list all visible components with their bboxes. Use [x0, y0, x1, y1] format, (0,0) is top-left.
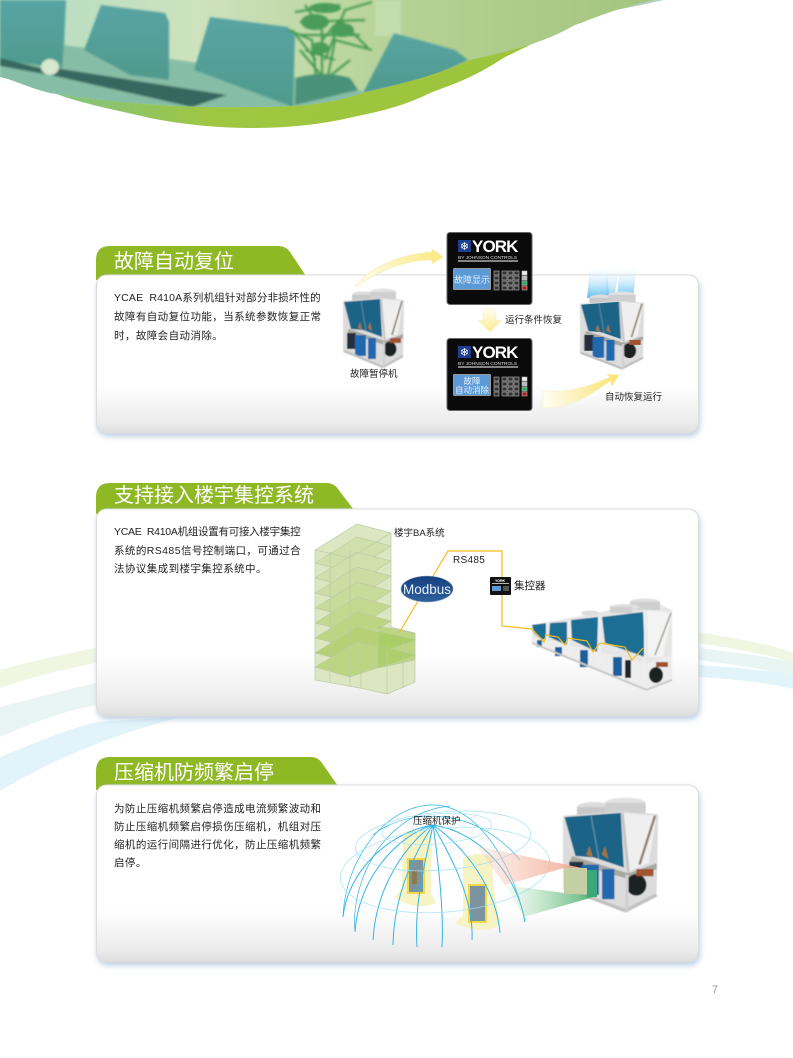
- compressor left: [395, 830, 436, 906]
- controller: fault cleared: [447, 338, 532, 410]
- label: 故障暂停机: [350, 368, 398, 380]
- beam from chiller: [476, 846, 597, 917]
- description text: [114, 525, 301, 575]
- icon: stopped chiller: [343, 288, 404, 368]
- heading tab: 压缩机防频繁启停: [114, 761, 274, 784]
- heading tab: 支持接入楼宇集控系统: [114, 484, 314, 507]
- label: 压缩机保护: [413, 815, 461, 827]
- label: 自动恢复运行: [605, 391, 663, 403]
- plant: [288, 2, 372, 76]
- panel card: [96, 785, 698, 962]
- controller: fault display: 故障显示: [454, 274, 490, 285]
- Modbus badge: [401, 576, 453, 602]
- description text: 法协议集成到楼宇集控系统中。: [114, 562, 267, 575]
- label: 集控器: [514, 579, 546, 592]
- controller: fault display: YORK: [472, 237, 519, 256]
- heading tab: 故障自动复位: [114, 250, 234, 273]
- panel: building control: [96, 483, 698, 716]
- icon: chiller: [563, 798, 658, 912]
- arrow: condition restored: [478, 309, 502, 332]
- yellow signal line: [399, 551, 643, 660]
- panel card: [96, 275, 698, 433]
- description text: 启停。: [114, 856, 147, 869]
- controller: fault display: ❄: [460, 241, 469, 253]
- icon: running chiller: [580, 291, 644, 369]
- protective dome: [337, 804, 553, 947]
- page number: 7: [712, 984, 718, 996]
- label: RS485: [453, 555, 485, 566]
- header photo: conference room: [0, 0, 654, 108]
- label: 运行条件恢复: [505, 314, 563, 326]
- description text: 防止压缩机频繁启停损伤压缩机，机组对压: [114, 820, 322, 833]
- panel: fault auto reset: [96, 232, 698, 433]
- arrow: auto recovery: [543, 374, 619, 408]
- description text: [114, 802, 322, 869]
- description text: 缩机的运行间隔进行优化，防止压缩机频繁: [114, 838, 322, 851]
- description text: YCAE R410A系列机组针对部分非损坏性的: [114, 291, 321, 304]
- icon: cold air beams: [587, 265, 637, 298]
- controller: fault cleared: YORK: [472, 343, 519, 362]
- controller: fault display: [447, 232, 532, 304]
- controller: fault cleared: BY JOHNSON CONTROLS: [458, 361, 517, 367]
- heading tab: [96, 483, 354, 514]
- description text: 时，故障会自动消除。: [114, 329, 223, 342]
- chiller row: [532, 598, 672, 690]
- compressor right: [455, 854, 500, 930]
- description text: 为防止压缩机频繁启停造成电流频繁波动和: [114, 802, 321, 815]
- description text: 故障有自动复位功能，当系统参数恢复正常: [114, 310, 321, 323]
- icon: controller: YORK: [495, 579, 506, 583]
- label: 楼宇BA系统: [394, 527, 445, 539]
- icon: controller: [490, 577, 511, 595]
- controller: fault cleared: 故障: [463, 376, 481, 386]
- Modbus badge: Modbus: [403, 582, 451, 597]
- controller: fault display: BY JOHNSON CONTROLS: [458, 255, 517, 261]
- description text: [114, 291, 321, 342]
- heading tab: [96, 246, 306, 280]
- panel: compressor protection: [96, 757, 698, 962]
- description text: 系统的RS485信号控制端口，可通过合: [114, 544, 301, 557]
- header band: [0, 0, 664, 130]
- panel card: [96, 509, 698, 716]
- controller: fault cleared: 自动消除: [455, 385, 489, 395]
- background swooshes: [0, 632, 793, 791]
- controller: fault cleared: ❄: [460, 347, 469, 359]
- heading tab: [96, 757, 338, 790]
- building illustration: [315, 524, 415, 694]
- arrow: to fault display: [355, 249, 443, 287]
- description text: YCAE R410A机组设置有可接入楼宇集控: [114, 525, 301, 538]
